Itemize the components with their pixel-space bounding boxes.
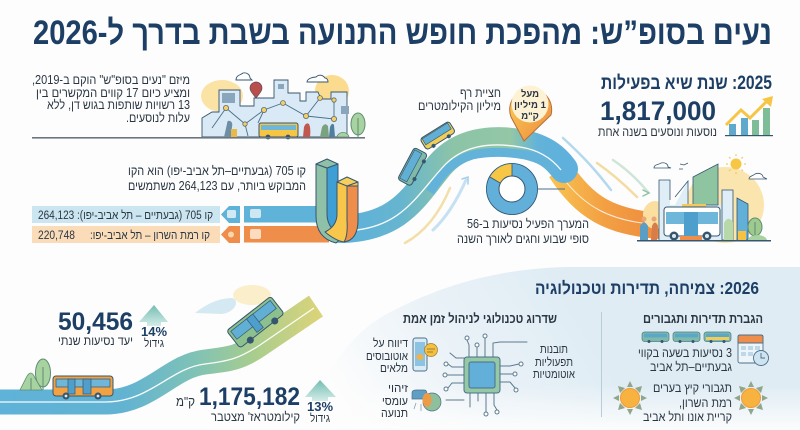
intro text block bbox=[32, 73, 190, 125]
icon: microchip bbox=[443, 334, 527, 416]
text: million km bbox=[418, 86, 501, 113]
stat: passengers: 1,817,000 bbox=[600, 96, 716, 126]
illustration: city network with bus bbox=[201, 73, 365, 139]
map pin callout: 1 מיליון bbox=[514, 100, 547, 111]
text: crowded buses: דיווח על bbox=[373, 337, 409, 350]
icon: traffic detection bbox=[412, 390, 441, 411]
route rows: line statistics: קו 705 (גבעתיים – תל אביב-יפו): 264,123 bbox=[38, 209, 213, 222]
cloud decoration bbox=[195, 285, 271, 314]
illustration: destination city with bus bbox=[637, 154, 771, 243]
icon: three small buses bbox=[642, 332, 731, 343]
text: operating system bbox=[457, 217, 589, 246]
icon: growth chart bbox=[725, 96, 773, 136]
map pin callout: ק"מ bbox=[521, 111, 539, 122]
text: three trips bbox=[638, 346, 732, 374]
text: operating system: המערך הפעיל נסיעות ב-56 bbox=[467, 217, 589, 231]
intro text block: ומציע כיום 17 קווים המקשרים בין bbox=[36, 86, 190, 100]
stat: annual trips target: יעד נסיעות שנתי bbox=[58, 334, 133, 348]
text: three trips: גבעתיים–תל אביב bbox=[650, 360, 732, 374]
text: busiest line bbox=[128, 163, 306, 193]
text: insights: תפעוליות bbox=[535, 356, 573, 369]
text: crowded buses: מלאים bbox=[380, 362, 408, 375]
stat: passengers: נוסעות ונוסעים בשנה אחת bbox=[598, 125, 717, 139]
stat: passengers bbox=[598, 96, 717, 139]
donut chart bbox=[486, 164, 565, 214]
baseline rule bbox=[32, 137, 365, 139]
growth 14 percent bbox=[139, 305, 168, 350]
icon: sun left bbox=[613, 381, 647, 415]
text: summer reinforcement bbox=[643, 381, 732, 424]
intro text block: עלות לנוסעים. bbox=[126, 111, 190, 125]
text: insights bbox=[533, 344, 576, 381]
text: million km: מיליון הקילומטרים bbox=[418, 99, 501, 113]
text: summer reinforcement: קריית אונו ותל אביב bbox=[643, 410, 732, 424]
text: traffic congestion bbox=[381, 383, 408, 420]
map pin callout bbox=[510, 86, 552, 141]
column heading: הגברת תדירות ותגבורים bbox=[643, 311, 763, 326]
stat: cumulative mileage: ק"מ bbox=[176, 394, 195, 409]
stat: cumulative mileage: 1,175,182 bbox=[199, 383, 300, 411]
route rows: line statistics bbox=[32, 206, 329, 243]
text: summer reinforcement: תגבורי קיץ בערים bbox=[653, 381, 732, 395]
text: busiest line: המבוקש ביותר, עם 264,123 משתמשים bbox=[128, 178, 306, 193]
column heading: שדרוג טכנולוגי לניהול זמן אמת bbox=[403, 311, 557, 326]
map pin callout: מעל bbox=[521, 89, 539, 100]
text: insights: תובנות bbox=[540, 344, 568, 356]
growth 14 percent: גידול bbox=[144, 337, 164, 350]
route rows: line statistics: קו רמת השרון – תל אביב-יפו: bbox=[90, 229, 210, 242]
growth 13 percent bbox=[305, 380, 336, 425]
growth 13 percent: 13% bbox=[307, 399, 333, 414]
column: technology upgrade bbox=[366, 311, 576, 420]
stat: annual trips target: 50,456 bbox=[58, 308, 133, 336]
heading: 2026: 2026: צמיחה, תדירות וטכנולוגיה bbox=[535, 278, 759, 298]
text: summer reinforcement: רמת השרון, bbox=[679, 396, 732, 410]
growth 14 percent: 14% bbox=[141, 324, 167, 339]
stat: cumulative mileage: קילומטראז' מצטבר bbox=[211, 410, 300, 424]
road: main winding route bbox=[340, 141, 660, 231]
icon: calendar and clock bbox=[738, 335, 768, 366]
text: traffic congestion: תנועה bbox=[381, 408, 408, 420]
road: growth slope bbox=[0, 306, 316, 402]
intro text block: מיזם "נעים בסופ"ש" הוקם ב-2019, bbox=[32, 73, 190, 87]
3D U-shaped bar chart bbox=[316, 159, 358, 243]
text: million km: חציית רף bbox=[460, 86, 501, 100]
column divider bbox=[601, 312, 602, 417]
icon: sun right bbox=[734, 381, 768, 415]
lower section background bbox=[280, 267, 800, 430]
route rows: line statistics: 220,748 bbox=[38, 230, 75, 242]
icon: phone with alert bbox=[413, 338, 438, 371]
column: frequency and reinforcement bbox=[613, 311, 768, 424]
icon: trees bbox=[20, 359, 50, 390]
stat: annual trips target bbox=[58, 308, 133, 348]
text: busiest line: קו 705 (גבעתיים–תל אביב-יפו) הוא הקו bbox=[128, 163, 306, 178]
heading: 2025: 2025: שנת שיא בפעילות bbox=[601, 73, 772, 94]
icon: bus on slope bbox=[227, 296, 286, 351]
text: three trips: 3 נסיעות בשעה בקווי bbox=[638, 346, 732, 360]
buses climbing the road bbox=[397, 121, 457, 187]
intro text block: 13 רשויות שותפות בגוש דן, ללא bbox=[47, 98, 190, 112]
text: crowded buses bbox=[366, 337, 409, 375]
text: insights: אוטומטיות bbox=[533, 369, 576, 381]
icon: orange bus bbox=[53, 376, 113, 400]
text: operating system: סופי שבוע וחגים לאורך השנה bbox=[457, 232, 589, 246]
growth 13 percent: גידול bbox=[310, 412, 330, 425]
stat: cumulative mileage bbox=[176, 383, 300, 424]
text: traffic congestion: זיהוי bbox=[388, 383, 408, 395]
arrows: motion streaks by road bbox=[405, 138, 649, 243]
text: traffic congestion: עומסי bbox=[382, 396, 408, 408]
text: crowded buses: אוטובוסים bbox=[366, 351, 409, 363]
